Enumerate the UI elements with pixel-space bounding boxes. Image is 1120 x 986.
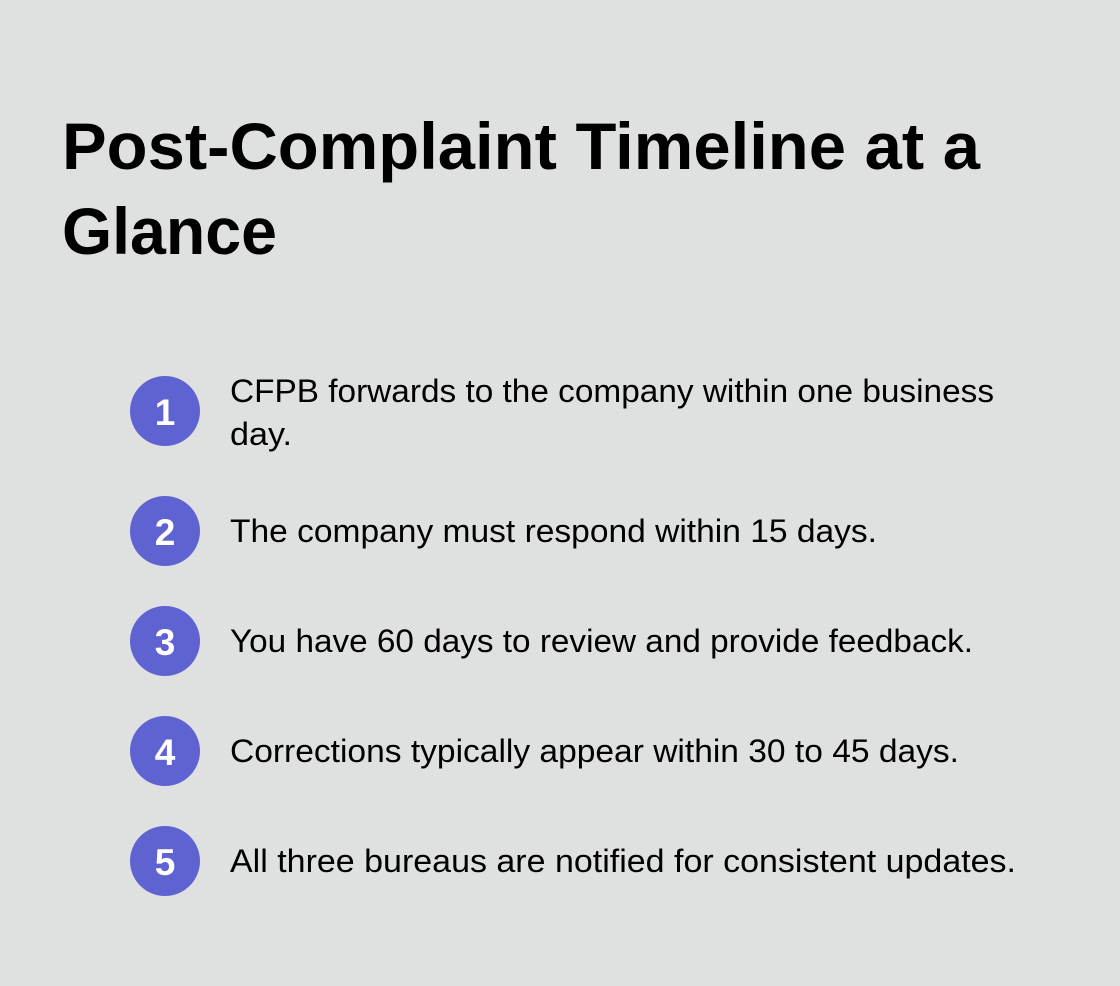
- step 1 badge: 1: [155, 392, 175, 433]
- step 1 text: day.: [230, 416, 292, 452]
- step 3 badge: [130, 606, 200, 676]
- step 4 badge: 4: [155, 732, 176, 773]
- step 2 badge: 2: [155, 512, 175, 553]
- step 5: [130, 826, 1016, 896]
- step 4 text: Corrections typically appear within 30 to 45 days.: [230, 733, 959, 769]
- title: [62, 109, 981, 268]
- step 5 badge: 5: [155, 842, 175, 883]
- step 1 text: [230, 373, 994, 452]
- step 3: [130, 606, 973, 676]
- step 5 badge: [130, 826, 200, 896]
- title: Post-Complaint Timeline at a: [62, 109, 981, 183]
- step 4: [130, 716, 959, 786]
- step 1 text: CFPB forwards to the company within one business: [230, 373, 994, 409]
- step 2 text: The company must respond within 15 days.: [230, 513, 877, 549]
- step 3 text: You have 60 days to review and provide feedback.: [230, 623, 973, 659]
- step 4 badge: [130, 716, 200, 786]
- title: Glance: [62, 194, 277, 268]
- step 2 badge: [130, 496, 200, 566]
- step 5 text: All three bureaus are notified for consistent updates.: [230, 843, 1016, 879]
- step 1 badge: [130, 376, 200, 446]
- step 2: [130, 496, 877, 566]
- step 3 badge: 3: [155, 622, 175, 663]
- step 1: [130, 373, 994, 452]
